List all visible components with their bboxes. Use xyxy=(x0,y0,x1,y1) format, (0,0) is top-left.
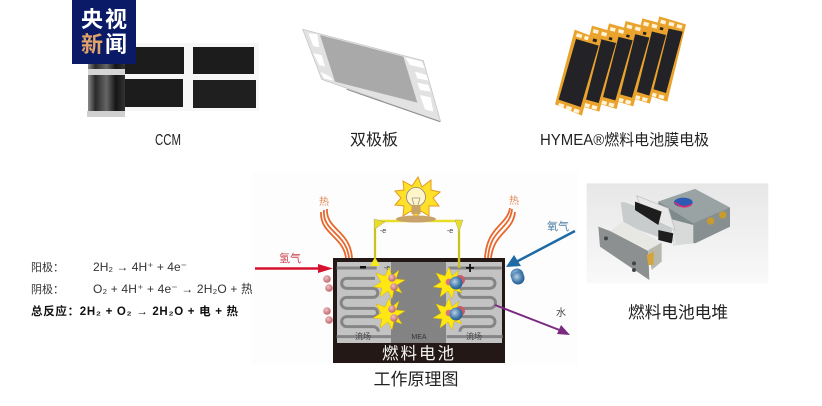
panel: working principle diagram xyxy=(252,172,578,365)
heat waves left xyxy=(321,209,352,258)
arrow: oxygen in xyxy=(506,231,575,267)
label: MEA: MEA xyxy=(411,334,427,341)
label: water: 水 xyxy=(556,307,566,319)
reaction star: top right xyxy=(433,267,465,299)
card 5 xyxy=(623,18,669,104)
right flow field xyxy=(447,268,503,337)
reaction star: top left xyxy=(373,267,405,299)
water molecules on right stars xyxy=(446,275,465,320)
arrow: hydrogen in xyxy=(255,264,333,273)
label: bipolar plate: 双极板 xyxy=(350,131,398,149)
CCM black sheet bottom right xyxy=(193,80,256,108)
arrow: water out xyxy=(495,305,570,335)
label: electron left: -e xyxy=(380,228,386,235)
logo: CCTV news: 央 xyxy=(81,7,103,32)
CCM black sheet top left xyxy=(125,47,184,74)
logo: CCTV news: 视 xyxy=(105,7,127,32)
cathode equation: 阴极： xyxy=(31,282,64,296)
CCM black sheet top right xyxy=(193,47,254,74)
panel: fuel cell stack photo xyxy=(587,183,768,283)
label: oxygen: 氧气 xyxy=(547,219,569,233)
hydrogen atoms on left stars xyxy=(388,274,398,322)
CCM film roll xyxy=(87,63,125,117)
label: HYMEA: HYMEA®燃料电池膜电极 xyxy=(540,131,709,149)
label: CCM: CCM xyxy=(155,132,181,149)
label: fuel cell: 燃料电池 xyxy=(382,344,456,363)
card 4 xyxy=(607,21,653,106)
cathode equation: O₂ + 4H⁺ + 4e⁻ → 2H₂O + 热 xyxy=(93,282,253,296)
minus sign xyxy=(360,266,366,268)
label: flow field right: 流场 xyxy=(466,331,482,341)
circuit wire xyxy=(370,219,463,268)
card 1 front xyxy=(555,30,601,116)
label: working principle: 工作原理图 xyxy=(374,370,458,389)
label: electron inside: -e xyxy=(384,265,390,272)
left flow field xyxy=(337,268,391,337)
label: flow field left: 流场 xyxy=(355,331,371,341)
panel: HYMEA membrane electrode cards xyxy=(555,16,686,116)
heat waves right xyxy=(485,208,515,258)
icon: light bulb xyxy=(395,177,440,222)
CCM black sheet bottom left xyxy=(125,79,183,107)
anode equation xyxy=(31,260,187,274)
reaction star: bottom right xyxy=(433,298,465,330)
card 6 xyxy=(640,16,686,102)
anode equation: 阳极： xyxy=(31,260,64,274)
logo: CCTV news: 新 xyxy=(81,32,103,57)
panel: CCM membrane photo xyxy=(87,43,259,117)
label: fuel cell stack: 燃料电池电堆 xyxy=(628,303,728,322)
total reaction: 总反应：2H₂ + O₂ → 2H₂O + 电 + 热 xyxy=(31,304,238,318)
card 2 xyxy=(573,26,619,112)
panel: bipolar plate photo xyxy=(303,29,441,122)
label: heat left: 热 xyxy=(319,195,329,208)
logo: CCTV news: 闻 xyxy=(105,32,127,57)
label: hydrogen: 氢气 xyxy=(279,251,301,265)
label: heat right: 热 xyxy=(509,194,519,207)
card 3 xyxy=(590,23,636,109)
logo: CCTV news xyxy=(72,0,136,64)
icon: oxygen molecule xyxy=(510,268,524,284)
panel: reaction equations xyxy=(31,260,253,318)
icon: hydrogen molecules xyxy=(323,275,333,324)
label: electron right: -e xyxy=(447,228,453,235)
reaction star: bottom left xyxy=(373,298,405,330)
plus sign: + xyxy=(465,260,475,277)
anode equation: 2H₂ → 4H⁺ + 4e⁻ xyxy=(93,260,187,274)
fuel cell body xyxy=(333,258,505,363)
